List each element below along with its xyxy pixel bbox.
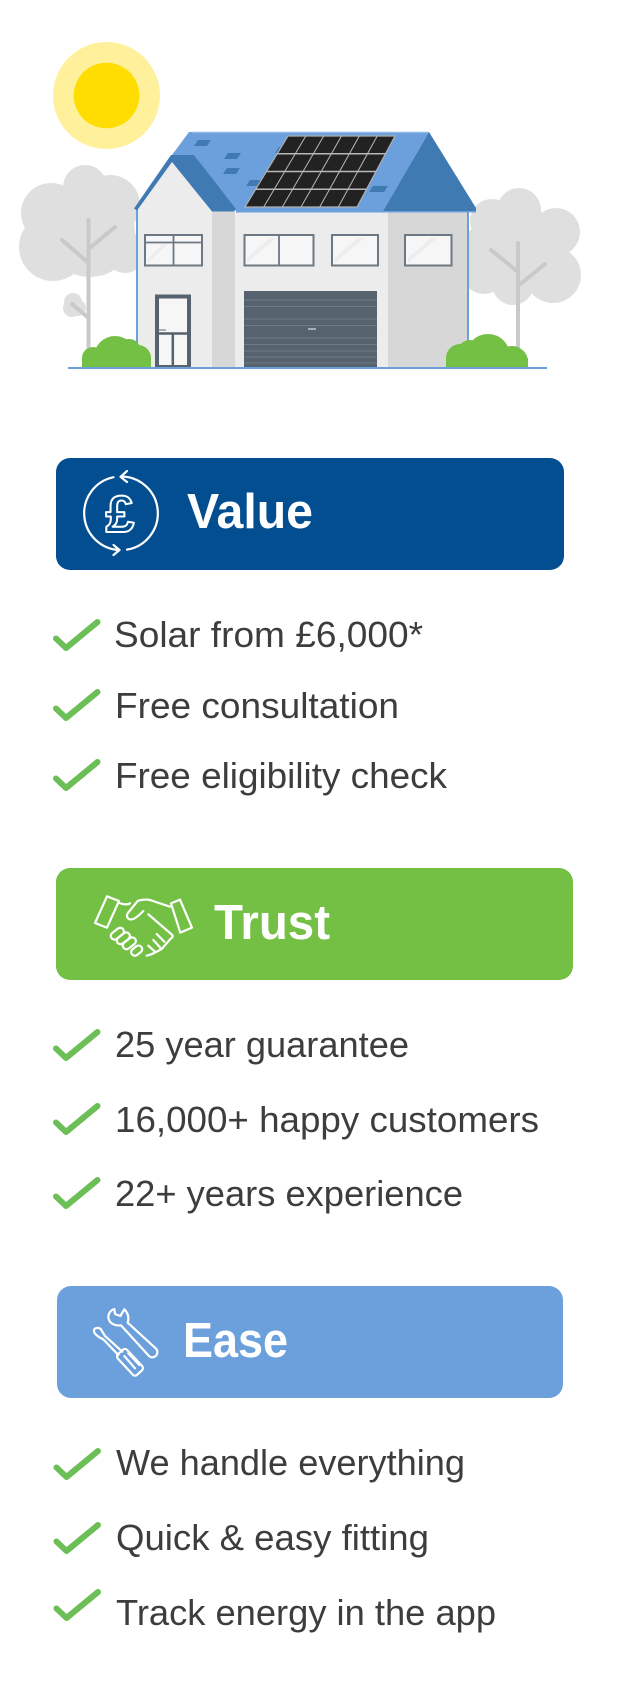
solar panel array xyxy=(245,136,395,207)
value banner xyxy=(56,458,564,570)
panel: trust xyxy=(56,868,573,1214)
illustration: house with solar panels xyxy=(19,42,581,378)
house walls xyxy=(137,162,468,367)
item: customers: 16,000+ happy customers xyxy=(115,1099,539,1140)
icon: left bush xyxy=(82,336,151,367)
check xyxy=(56,1525,98,1551)
icon: spanner and screwdriver xyxy=(94,1309,157,1377)
icon: sun xyxy=(53,42,160,149)
item: eligibility: Free eligibility check xyxy=(115,755,448,796)
trust banner xyxy=(56,868,573,980)
icon: right tree xyxy=(462,188,581,352)
item: experience: 22+ years experience xyxy=(115,1173,463,1214)
garage door xyxy=(244,291,377,367)
icon: right bush xyxy=(446,334,528,367)
item: solar price: Solar from £6,000* xyxy=(114,614,423,655)
panel: ease xyxy=(56,1286,563,1633)
check xyxy=(56,762,98,788)
heading: ease: Ease xyxy=(183,1314,288,1368)
heading: value: Value xyxy=(187,485,313,539)
check xyxy=(56,1032,98,1058)
check xyxy=(56,622,98,648)
item: guarantee: 25 year guarantee xyxy=(115,1024,409,1065)
icon: handshake xyxy=(95,896,192,957)
item: consultation: Free consultation xyxy=(115,685,399,726)
item: app: Track energy in the app xyxy=(116,1592,496,1633)
check xyxy=(56,1592,98,1618)
item: handle everything: We handle everything xyxy=(116,1442,465,1483)
check xyxy=(56,692,98,718)
item: fitting: Quick & easy fitting xyxy=(116,1517,429,1558)
check xyxy=(56,1180,98,1206)
heading: trust: Trust xyxy=(214,896,330,950)
icon: pound with circular arrows xyxy=(84,471,158,555)
panel: value xyxy=(56,458,564,796)
icon: left tree xyxy=(19,165,146,354)
ground line xyxy=(68,367,547,369)
check xyxy=(56,1106,98,1132)
icon: pound with circular arrows: £ xyxy=(106,486,135,544)
ease banner xyxy=(57,1286,563,1398)
windows xyxy=(145,235,452,266)
door xyxy=(157,296,189,367)
roof xyxy=(134,132,476,212)
check xyxy=(56,1451,98,1477)
